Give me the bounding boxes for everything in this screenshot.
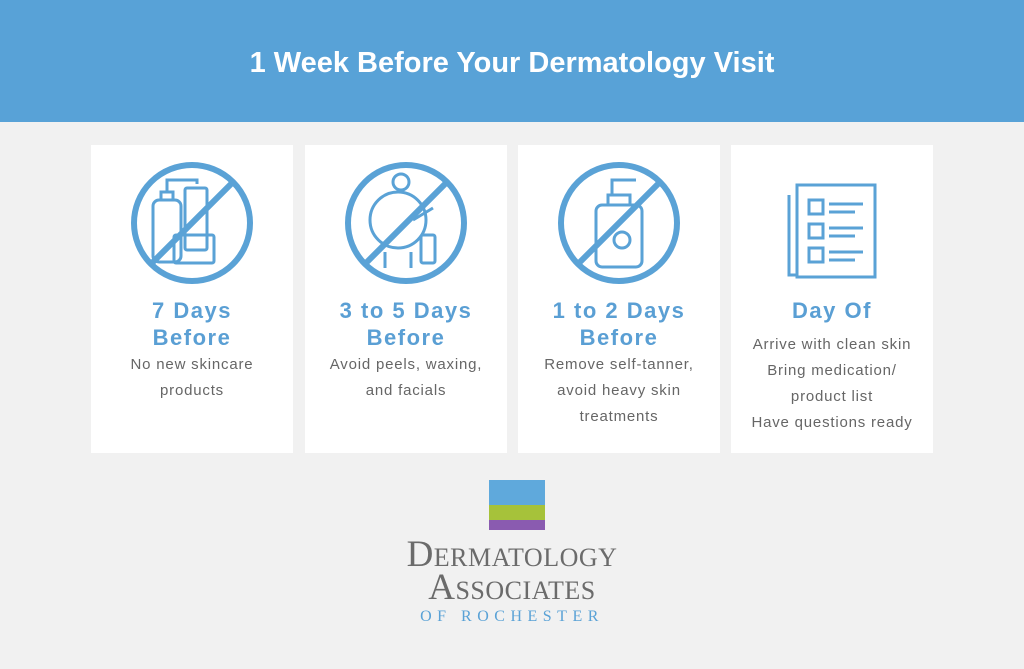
heading: Before: [580, 325, 658, 350]
logo text: [407, 534, 617, 608]
heading: 1 to 2 Days: [553, 298, 685, 323]
heading: Before: [153, 325, 231, 350]
logo: [407, 480, 617, 625]
text: No new skincare: [131, 356, 253, 373]
icon: no skincare: [131, 162, 253, 284]
panel: day of: [731, 145, 933, 453]
text: products: [160, 382, 224, 399]
text: and facials: [366, 382, 446, 399]
text: treatments: [580, 408, 658, 425]
logo: OF ROCHESTER: [420, 608, 604, 625]
text: Have questions ready: [751, 414, 913, 431]
heading: Day Of: [792, 298, 872, 323]
heading: 3 to 5 Days: [340, 298, 472, 323]
text: Bring medication/: [767, 362, 897, 379]
panel: 3 to 5 days: [305, 145, 507, 453]
text: [544, 356, 694, 425]
heading: [340, 298, 472, 350]
logo text: Associates: [428, 567, 596, 608]
text: [131, 356, 253, 399]
text: [330, 356, 482, 399]
icon: no self-tanner: [558, 162, 680, 284]
heading: 7 Days: [152, 298, 232, 323]
heading: Before: [367, 325, 445, 350]
title: 1 Week Before Your Dermatology Visit: [250, 47, 774, 79]
logo mark: [489, 480, 545, 530]
text: [751, 336, 913, 431]
logo text: Dermatology: [407, 534, 617, 575]
heading: [152, 298, 232, 350]
text: product list: [791, 388, 873, 405]
text: avoid heavy skin: [557, 382, 681, 399]
panel: 7 days: [91, 145, 293, 453]
text: Remove self-tanner,: [544, 356, 694, 373]
text: Arrive with clean skin: [753, 336, 911, 353]
panel: 1 to 2 days: [518, 145, 720, 453]
icon: no facials: [345, 162, 467, 284]
heading: [553, 298, 685, 350]
title: [0, 0, 1024, 122]
text: Avoid peels, waxing,: [330, 356, 482, 373]
icon: checklist: [788, 184, 876, 278]
